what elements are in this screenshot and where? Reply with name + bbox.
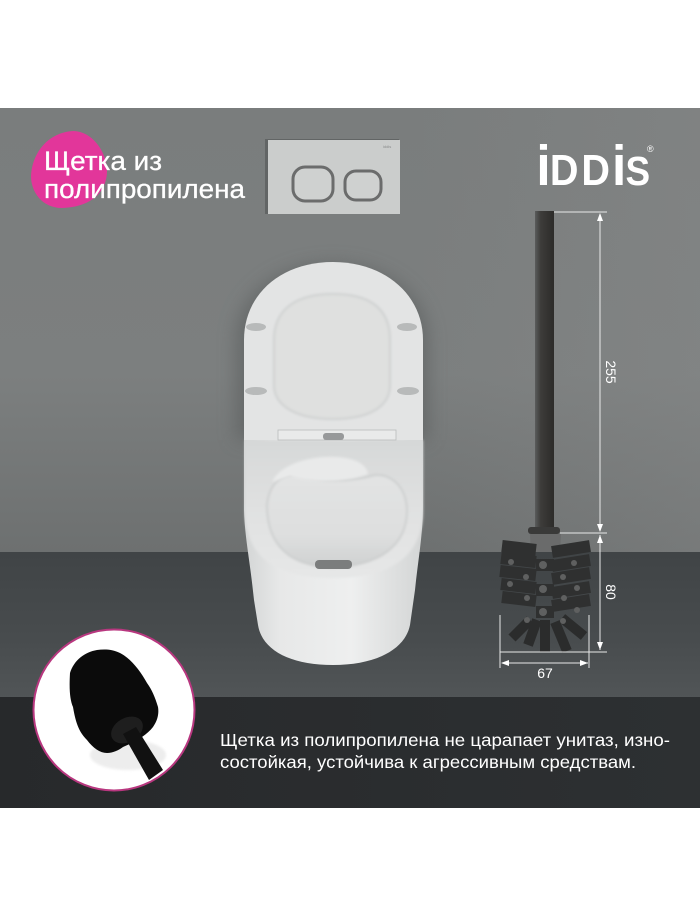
caption: состойкая, устойчива к агрессивным средствам. xyxy=(220,752,636,772)
flush plate: iddis xyxy=(383,144,391,149)
collar xyxy=(528,527,560,534)
dimension label 80: 80 xyxy=(603,584,619,600)
bowl inside xyxy=(267,475,407,567)
flush plate xyxy=(265,139,400,214)
logo: iDDiS: i xyxy=(612,135,626,198)
logo: iDDiS xyxy=(536,135,654,198)
flush hood xyxy=(272,457,368,482)
toilet xyxy=(236,262,428,665)
wall background xyxy=(0,108,700,553)
dimension label 255: 255 xyxy=(603,360,619,384)
pink blob behind heading xyxy=(31,131,107,208)
heading: полипропилена xyxy=(44,174,246,204)
dimension label 67: 67 xyxy=(537,665,553,681)
brush photo circle xyxy=(34,630,194,790)
handle xyxy=(535,211,554,530)
bumpers xyxy=(246,323,266,331)
floor xyxy=(0,552,700,698)
ceramic body xyxy=(244,440,423,665)
photo shadow xyxy=(90,740,166,770)
inner lid xyxy=(274,294,390,419)
drain xyxy=(315,560,352,569)
collar xyxy=(106,711,148,749)
logo: iDDiS: D xyxy=(550,145,578,194)
logo: iDDiS: D xyxy=(581,145,610,194)
logo: iDDiS: i xyxy=(536,135,551,198)
seat lid xyxy=(244,262,423,440)
handle xyxy=(123,727,163,780)
wall shadow xyxy=(236,264,428,440)
bristle hubs xyxy=(507,559,580,624)
dark caption band xyxy=(0,697,700,808)
bristles xyxy=(500,546,590,612)
heading: Щетка из xyxy=(44,146,162,176)
brush head xyxy=(70,649,158,753)
brush diagram xyxy=(500,211,590,652)
hinge bar xyxy=(278,430,396,440)
logo: iDDiS: S xyxy=(626,149,650,194)
caption: Щетка из полипропилена не царапает унитаз, изно- xyxy=(220,730,670,750)
logo: iDDiS: ® xyxy=(647,144,654,154)
dimension lines xyxy=(500,212,607,668)
bowl rim xyxy=(245,440,423,578)
